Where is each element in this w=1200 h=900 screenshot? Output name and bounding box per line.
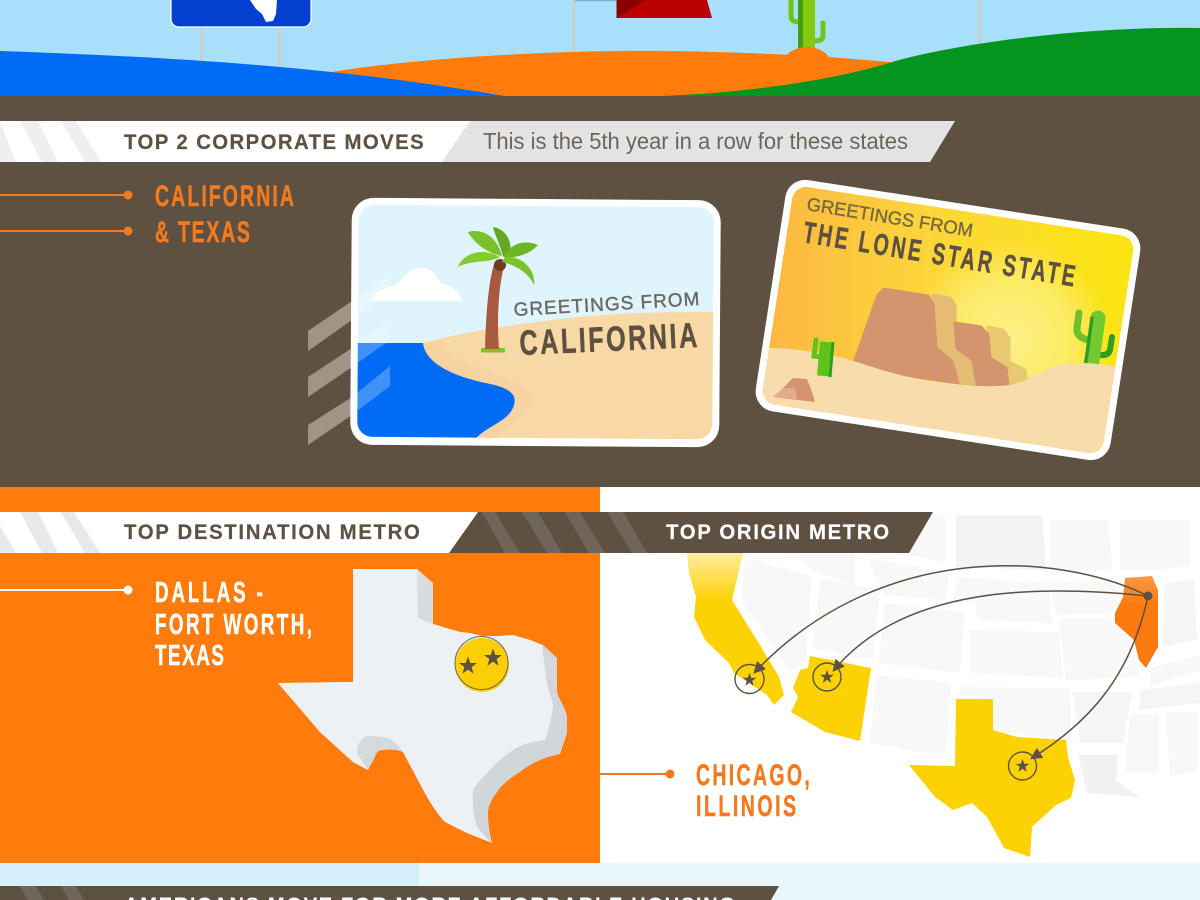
right cactus	[1077, 313, 1112, 368]
panel: top origin metro	[600, 487, 1200, 863]
label: Dallas Fort Worth: FORT WORTH,	[155, 609, 312, 641]
banner: destination and origin metro: TOP DESTINATION METRO	[124, 521, 420, 544]
landscape header	[0, 0, 1200, 96]
map: Texas with Dallas marker	[278, 569, 567, 843]
left cactus	[814, 340, 833, 377]
hills	[0, 28, 1200, 96]
mesa	[855, 289, 1027, 385]
migration arrows and star markers	[735, 566, 1152, 780]
cactus	[791, 0, 823, 52]
label: California and Texas: & TEXAS	[155, 216, 250, 249]
banner: top 2 corporate moves	[0, 121, 955, 162]
panel: top destination metro	[0, 487, 600, 863]
banner: top 2 corporate moves: This is the 5th year in a row for these states	[483, 128, 908, 154]
postcard text: THE LONE STAR STATE	[801, 216, 1078, 293]
label: California and Texas: CALIFORNIA	[155, 180, 294, 213]
decorative stripes behind postcard	[308, 301, 352, 445]
label: California and Texas	[0, 180, 294, 249]
faint US state map	[742, 515, 1200, 797]
rocks	[773, 378, 815, 402]
ocean	[357, 343, 515, 438]
banner: destination and origin metro	[0, 512, 933, 553]
label: Chicago Illinois: ILLINOIS	[696, 790, 796, 823]
palm tree	[458, 227, 538, 352]
sand	[762, 348, 1116, 453]
postcard text	[513, 289, 700, 363]
bottom section: affordable housing	[0, 863, 1200, 900]
postcard: California	[350, 198, 721, 447]
banner: destination and origin metro: TOP ORIGIN METRO	[666, 521, 889, 544]
highlighted destination states	[687, 553, 1158, 857]
beach	[423, 312, 720, 445]
label: Dallas Fort Worth: TEXAS	[155, 640, 224, 672]
postcard text: GREETINGS FROM	[805, 193, 975, 241]
postcard: Lone Star State	[750, 170, 1150, 470]
road sign with state silhouette	[171, 0, 311, 77]
postcard text: CALIFORNIA	[519, 316, 698, 363]
banner: top 2 corporate moves: TOP 2 CORPORATE MOVES	[124, 131, 424, 154]
flag and pole	[572, 0, 712, 56]
label: Chicago Illinois	[600, 759, 810, 823]
label: Chicago Illinois: CHICAGO,	[696, 759, 810, 792]
label: Dallas Fort Worth	[0, 577, 312, 672]
brown panel: corporate moves	[0, 96, 1200, 487]
glass stripes on card	[358, 343, 390, 411]
postcard text: GREETINGS FROM	[513, 289, 700, 321]
label: Dallas Fort Worth: DALLAS -	[155, 577, 263, 609]
cloud	[372, 268, 462, 301]
